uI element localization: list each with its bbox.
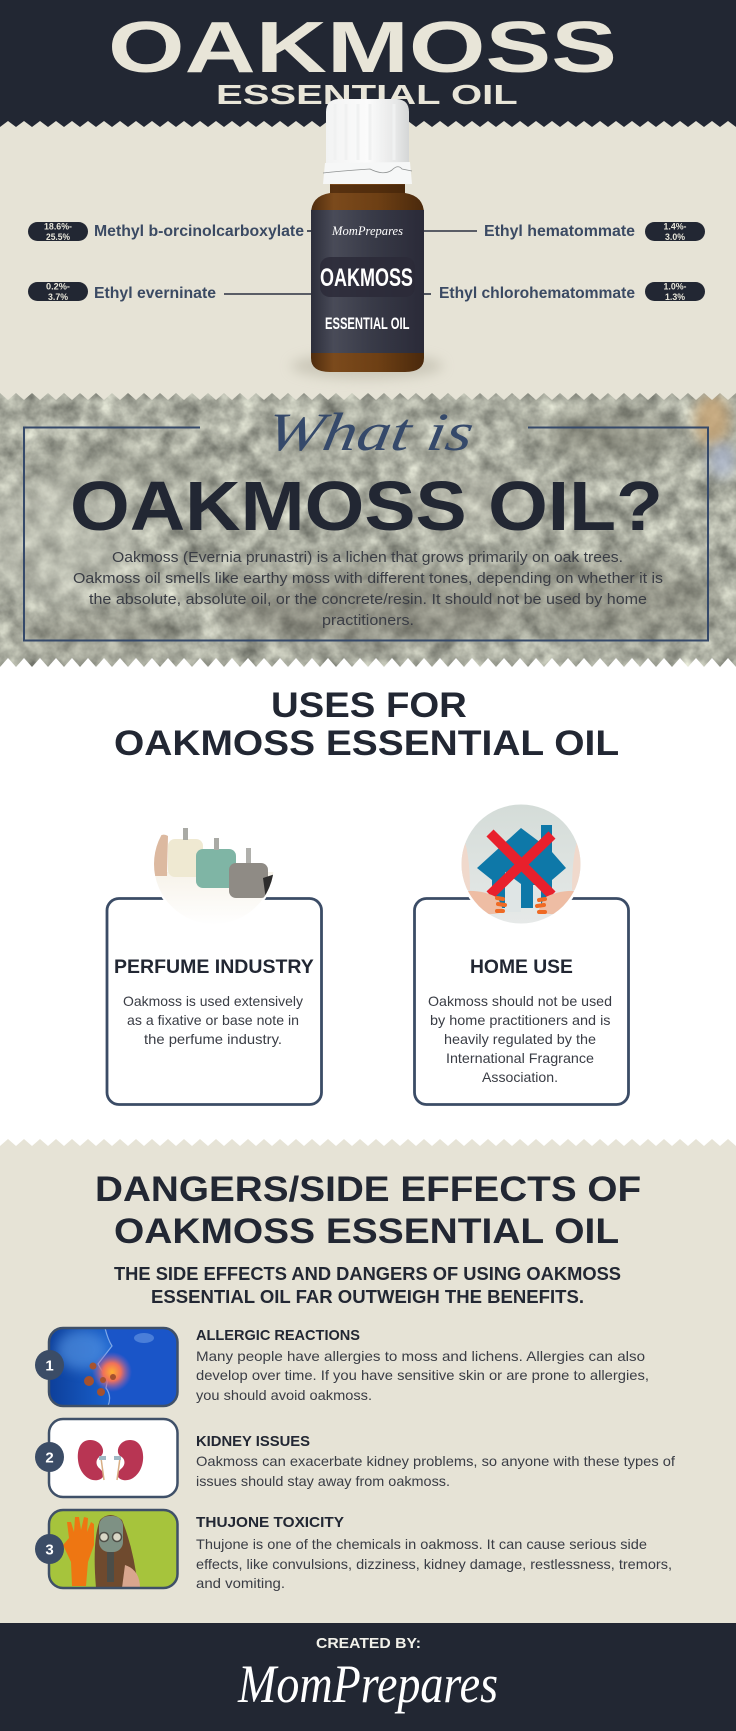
panel: what is oakmoss oil background photo [0, 393, 736, 667]
icon: nose with allergens [49, 1328, 178, 1406]
text: allergic reactions description: develop over time. If you have sensitive skin or are prone to allergies, [196, 1367, 649, 1383]
heading: allergic reactions: ALLERGIC REACTIONS [196, 1327, 360, 1344]
subheading: side effects outweigh benefits: THE SIDE EFFECTS AND DANGERS OF USING OAKMOSS [114, 1264, 621, 1284]
icon: essential oil bottle: MomPrepares [331, 223, 403, 238]
chemical: Ethyl hematommate [424, 222, 705, 243]
text: thujone toxicity description: Thujone is one of the chemicals in oakmoss. It can cause serious side [196, 1536, 647, 1552]
icon: crossed-out house [458, 804, 584, 924]
text block: what is description: practitioners. [322, 612, 414, 629]
title: Oakmoss: OAKMOSS [108, 8, 617, 88]
chemical: Ethyl chlorohematommate: 1.3% [665, 292, 686, 303]
icon: essential oil bottle: ESSENTIAL OIL [325, 314, 410, 333]
text: home use description: by home practitioners and is [430, 1012, 610, 1028]
text: allergic reactions description [196, 1348, 649, 1403]
heading: dangers and side effects: OAKMOSS ESSENTIAL OIL [114, 1211, 619, 1251]
badge: 2: 2 [45, 1450, 54, 1466]
heading: uses for oakmoss essential oil: USES FOR [271, 686, 467, 725]
heading: thujone toxicity: THUJONE TOXICITY [196, 1514, 344, 1531]
chemical: Ethyl chlorohematommate: Ethyl chlorohematommate [439, 285, 635, 302]
chemical: Ethyl everninate: Ethyl everninate [94, 285, 216, 302]
panel: home use [414, 802, 628, 1104]
text: kidney issues description: issues should stay away from oakmoss. [196, 1473, 450, 1489]
chemical: Methyl b-orcinolcarboxylate [28, 222, 312, 243]
heading: uses for oakmoss essential oil: OAKMOSS ESSENTIAL OIL [114, 723, 619, 763]
text: allergic reactions description: you should avoid oakmoss. [196, 1387, 372, 1403]
heading: kidney issues: KIDNEY ISSUES [196, 1433, 310, 1450]
text: perfume industry description: Oakmoss is used extensively [123, 993, 303, 1009]
text: home use description: Oakmoss should not be used [428, 993, 612, 1009]
text: thujone toxicity description: effects, like convulsions, dizziness, kidney damage, restlessness, tremors, [196, 1556, 672, 1572]
badge: 3 [35, 1534, 64, 1564]
zigzag edges of photo [0, 393, 736, 667]
panel: perfume industry [107, 800, 322, 1104]
subheading: side effects outweigh benefits [114, 1264, 621, 1307]
list item 3: thujone toxicity [35, 1510, 672, 1591]
chemical: Methyl b-orcinolcarboxylate: Methyl b-orcinolcarboxylate [94, 223, 304, 240]
text: kidney issues description [196, 1453, 675, 1489]
text block: what is description [73, 549, 663, 629]
subheading: side effects outweigh benefits: ESSENTIAL OIL FAR OUTWEIGH THE BENEFITS. [151, 1287, 584, 1307]
icon: essential oil bottle: OAKMOSS [320, 263, 413, 292]
text: home use description: Association. [482, 1069, 558, 1085]
text: home use description: heavily regulated by the [444, 1031, 596, 1047]
chemical: Ethyl hematommate: 3.0% [665, 232, 686, 243]
chemical: Ethyl chlorohematommate [424, 282, 705, 303]
chemical: Ethyl everninate: 3.7% [48, 292, 69, 303]
text: perfume industry description: as a fixative or base note in [127, 1012, 299, 1028]
icon: person in gas mask [49, 1510, 178, 1588]
chemical: Ethyl chlorohematommate: 1.0%- [664, 282, 686, 292]
badge: 1 [35, 1350, 64, 1380]
text: perfume industry description [123, 993, 303, 1047]
icon: kidneys [78, 1440, 143, 1480]
logo: MomPrepares: MomPrepares [237, 1654, 498, 1714]
text block: what is description: Oakmoss (Evernia prunastri) is a lichen that grows primarily on oak trees. [112, 549, 623, 566]
text: created by: CREATED BY: [316, 1635, 421, 1652]
chemical: Ethyl everninate: 0.2%- [46, 282, 70, 292]
chemical: Ethyl everninate [28, 282, 312, 303]
icon: perfume bottles [154, 828, 274, 906]
heading: What is: What is [262, 403, 478, 462]
text block: what is description: the absolute, absolute oil, or the concrete/resin. It should not be used by home [89, 591, 647, 608]
badge: 3: 3 [45, 1542, 54, 1558]
heading: perfume industry: PERFUME INDUSTRY [114, 957, 314, 978]
text: perfume industry description: the perfume industry. [144, 1031, 282, 1047]
text: home use description [428, 993, 612, 1085]
text: allergic reactions description: Many people have allergies to moss and lichens. Allergies can also [196, 1348, 645, 1364]
heading: home use: HOME USE [470, 957, 573, 978]
chemical: Methyl b-orcinolcarboxylate: 18.6%- [44, 222, 72, 232]
badge: 1: 1 [45, 1358, 54, 1374]
text block: what is description: Oakmoss oil smells like earthy moss with different tones, depending on whether it is [73, 570, 663, 587]
panel: dangers background [0, 1139, 736, 1623]
subtitle: Essential Oil: ESSENTIAL OIL [216, 80, 518, 110]
heading: Oakmoss Oil?: OAKMOSS OIL? [70, 466, 663, 545]
chemical: Ethyl hematommate: 1.4%- [664, 222, 686, 232]
list item 1: allergic reactions [35, 1327, 649, 1406]
badge: 2 [35, 1442, 64, 1472]
text: thujone toxicity description: and vomiting. [196, 1575, 285, 1591]
icon: essential oil bottle [291, 99, 443, 379]
heading: uses for oakmoss essential oil [114, 686, 619, 763]
panel: footer [0, 1623, 736, 1731]
panel: header band [0, 0, 736, 393]
text: home use description: International Fragrance [446, 1050, 594, 1066]
heading: dangers and side effects [95, 1170, 641, 1251]
list item 2: kidney issues [35, 1419, 675, 1497]
frame around what is section [24, 428, 708, 640]
text: kidney issues description: Oakmoss can exacerbate kidney problems, so anyone with these types of [196, 1453, 675, 1469]
text: thujone toxicity description [196, 1536, 672, 1591]
chemical: Ethyl hematommate: Ethyl hematommate [484, 223, 635, 240]
chemical: Methyl b-orcinolcarboxylate: 25.5% [46, 232, 70, 243]
heading: dangers and side effects: DANGERS/SIDE EFFECTS OF [95, 1170, 641, 1209]
